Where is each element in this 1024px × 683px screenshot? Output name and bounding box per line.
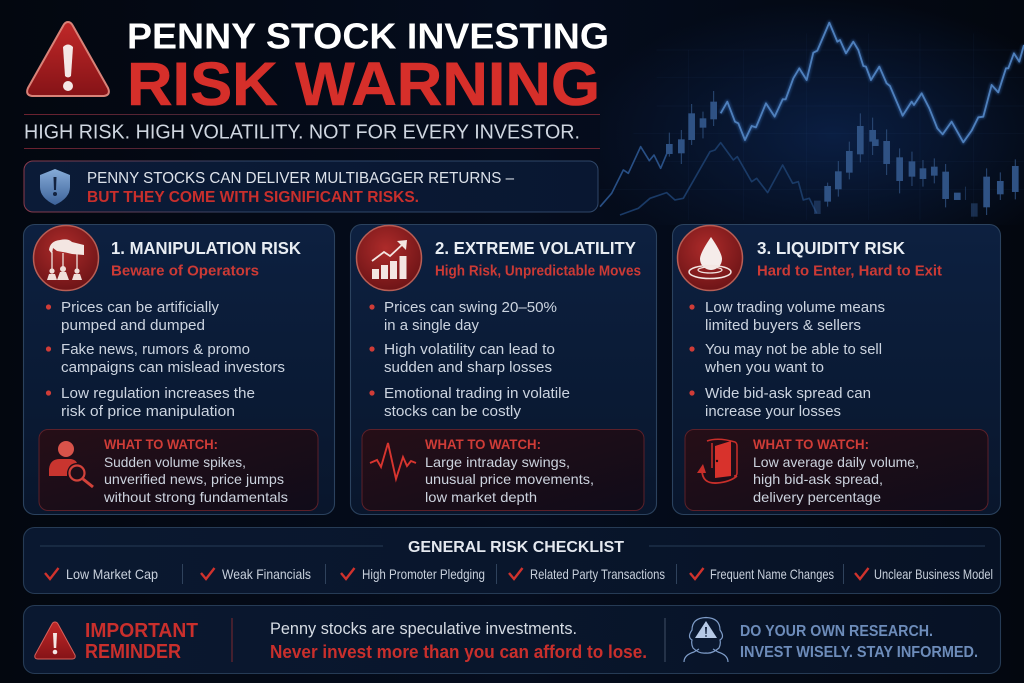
bullet list: risk of price manipulation	[61, 403, 235, 420]
call to action: INVEST WISELY. STAY INFORMED.	[740, 644, 978, 661]
subtitle: HIGH RISK. HIGH VOLATILITY. NOT FOR EVERY INVESTOR.	[24, 122, 580, 144]
callout: what to watch: without strong fundamentals	[103, 489, 288, 505]
card heading: Hard to Enter, Hard to Exit	[757, 262, 942, 280]
callout: what to watch: low market depth	[425, 489, 537, 505]
bullet list: High volatility can lead to	[384, 341, 555, 358]
icon: warning triangle	[27, 22, 109, 96]
icon: pulse line	[370, 443, 416, 479]
call to action: DO YOUR OWN RESEARCH.	[740, 623, 933, 640]
reminder message	[270, 619, 647, 662]
title	[127, 16, 609, 118]
bullet list	[46, 299, 285, 420]
callout: what to watch: WHAT TO WATCH:	[753, 436, 869, 452]
card heading	[111, 238, 301, 280]
bullet list	[689, 299, 885, 420]
chart: background candlesticks and price lines	[600, 23, 1024, 220]
panel: liquidity risk	[672, 224, 1000, 514]
reminder message: Never invest more than you can afford to lose.	[270, 642, 647, 662]
bullet list: Wide bid-ask spread can	[705, 385, 871, 402]
reminder heading: REMINDER	[85, 641, 181, 663]
panel: extreme volatility	[350, 224, 656, 514]
reminder message: Penny stocks are speculative investments.	[270, 619, 577, 638]
checklist item: high promoter pledging: High Promoter Pledging	[362, 566, 485, 582]
callout: what to watch: WHAT TO WATCH:	[425, 436, 541, 452]
bullet list: pumped and dumped	[61, 317, 205, 334]
card heading	[435, 238, 641, 280]
bullet list: Low regulation increases the	[61, 385, 255, 402]
panel: general risk checklist	[24, 528, 1000, 594]
callout: what to watch: delivery percentage	[753, 489, 881, 505]
checklist item: frequent name changes	[690, 566, 834, 582]
callout: what to watch: Sudden volume spikes,	[104, 454, 246, 470]
callout: what to watch: Large intraday swings,	[425, 454, 570, 470]
bullet list: Fake news, rumors & promo	[61, 341, 250, 358]
checklist item: related party transactions: Related Party Transactions	[530, 566, 665, 582]
card heading	[757, 238, 942, 280]
title: PENNY STOCK INVESTING	[127, 16, 609, 56]
callout: what to watch: unverified news, price jumps	[104, 471, 284, 487]
card heading: 3. LIQUIDITY RISK	[757, 238, 905, 258]
bullet list: Emotional trading in volatile	[384, 385, 570, 402]
checklist item: unclear business model: Unclear Business Model	[874, 566, 993, 582]
bullet list: increase your losses	[705, 403, 841, 420]
card heading: 1. MANIPULATION RISK	[111, 238, 301, 258]
panel: intro banner	[24, 161, 598, 212]
callout: what to watch: high bid-ask spread,	[753, 471, 883, 487]
callout: what to watch	[39, 430, 318, 510]
bullet list	[369, 299, 570, 420]
icon: shield	[40, 169, 70, 205]
checklist heading: GENERAL RISK CHECKLIST	[408, 539, 624, 556]
icon: head with warning	[684, 618, 728, 662]
checklist item: low market cap: Low Market Cap	[66, 566, 158, 582]
call to action	[740, 623, 978, 661]
callout: what to watch: Low average daily volume,	[753, 454, 919, 470]
banner text: BUT THEY COME WITH SIGNIFICANT RISKS.	[87, 189, 419, 206]
icon: exit door	[697, 439, 737, 483]
bullet list: Prices can swing 20–50%	[384, 299, 557, 316]
bullet list: sudden and sharp losses	[384, 359, 552, 376]
bullet list: Low trading volume means	[705, 299, 885, 316]
panel: important reminder	[24, 606, 1000, 674]
banner text	[87, 170, 514, 206]
callout: what to watch: unusual price movements,	[425, 471, 594, 487]
bullet list: Prices can be artificially	[61, 299, 219, 316]
callout: what to watch: WHAT TO WATCH:	[104, 436, 218, 452]
banner text: PENNY STOCKS CAN DELIVER MULTIBAGGER RETURNS –	[87, 170, 514, 187]
panel: manipulation risk	[24, 224, 334, 514]
icon: water drop	[678, 226, 742, 290]
reminder heading	[85, 620, 198, 663]
bullet list: campaigns can mislead investors	[61, 359, 285, 376]
icon: puppet hand	[34, 226, 98, 290]
bullet list: when you want to	[704, 359, 824, 376]
callout: what to watch	[685, 430, 988, 510]
title: RISK WARNING	[127, 50, 600, 118]
bullet list: in a single day	[384, 317, 479, 334]
bullet list: limited buyers & sellers	[705, 317, 861, 334]
card heading: Beware of Operators	[111, 262, 259, 280]
card heading: High Risk, Unpredictable Moves	[435, 262, 641, 280]
bullet list: You may not be able to sell	[705, 341, 882, 358]
checklist item: weak financials: Weak Financials	[222, 566, 311, 582]
icon: person with magnifier	[49, 441, 93, 487]
icon: small warning triangle	[35, 622, 75, 659]
bullet list: stocks can be costly	[384, 403, 521, 420]
checklist item: frequent name changes: Frequent Name Changes	[710, 566, 834, 582]
card heading: 2. EXTREME VOLATILITY	[435, 238, 636, 258]
callout: what to watch	[362, 430, 644, 510]
icon: rising bars and arrow	[356, 226, 422, 290]
reminder heading: IMPORTANT	[85, 620, 198, 642]
